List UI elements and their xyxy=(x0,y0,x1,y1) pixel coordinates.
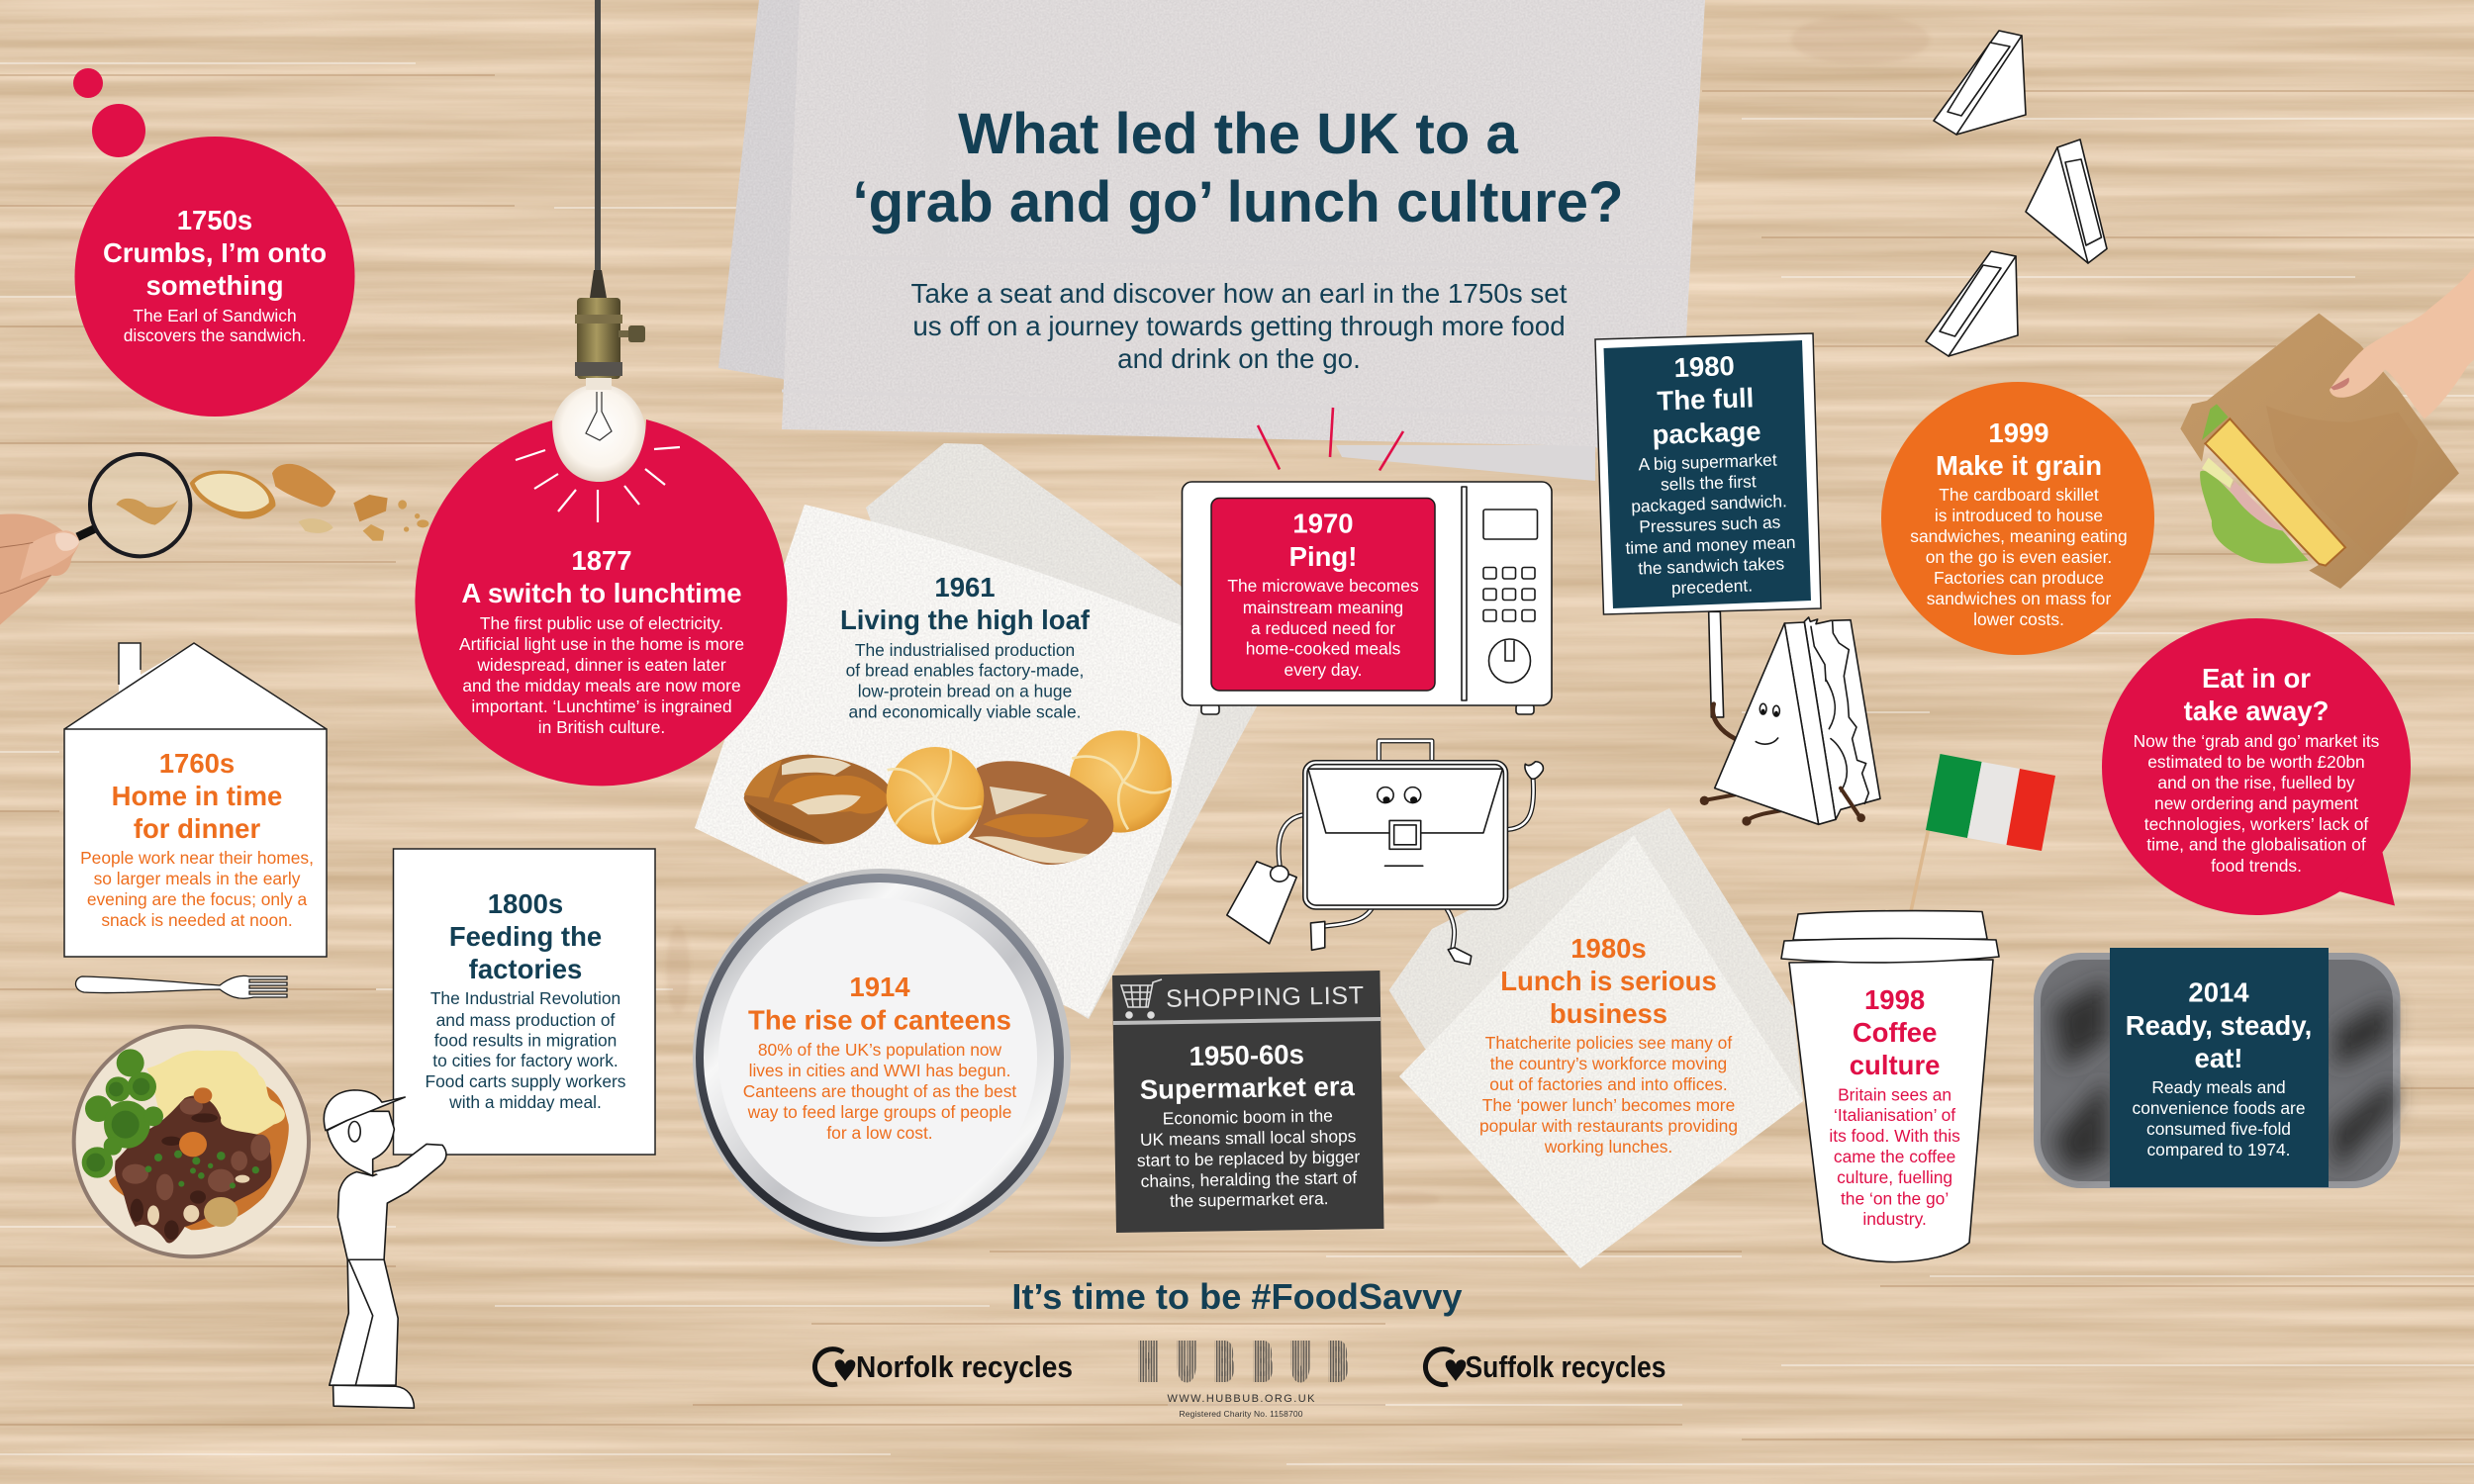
panel: 1998 coffee cup: culture, fuelling xyxy=(1837,1167,1952,1187)
panel: 1877 xyxy=(415,419,787,786)
panel: 1998 coffee cup: culture xyxy=(1850,1050,1940,1080)
panel: 1961 text: low-protein bread on a huge xyxy=(858,681,1072,700)
heading: ‘grab and go’ lunch culture? xyxy=(852,170,1624,234)
panel: 1999: lower costs. xyxy=(1973,609,2064,629)
logo: Hubbub: B xyxy=(1330,1339,1346,1386)
panel: 1970 microwave: every day. xyxy=(1285,660,1362,680)
panel: 1800s factories: factories xyxy=(469,954,582,984)
panel: 1950-60s shopping list: chains, heralding the start of xyxy=(1141,1167,1357,1191)
icon: factory worker holding sign xyxy=(324,1090,446,1408)
panel: 1999: Factories can produce xyxy=(1934,568,2104,588)
panel: 1760s house: 1760s xyxy=(159,748,235,779)
panel: 1980 full package sign: time and money mean xyxy=(1625,532,1796,558)
panel: 1998 coffee cup: Coffee xyxy=(1853,1017,1937,1048)
panel: 1950-60s shopping list: UK means small local shops xyxy=(1140,1126,1357,1150)
icon: hanging light bulb xyxy=(552,0,645,483)
icon: shopping cart xyxy=(1121,979,1162,1018)
panel: eat in or take away speech bubble: Eat in or xyxy=(2202,663,2311,694)
panel: 1980 full package sign: A big supermarket xyxy=(1638,450,1777,474)
top napkin xyxy=(718,0,1705,481)
panel: 1950-60s shopping list xyxy=(1112,971,1383,1233)
panel: 1800s factories: Feeding the xyxy=(449,921,602,952)
logo: Hubbub: U xyxy=(1179,1339,1194,1386)
panel: eat in or take away speech bubble: new ordering and payment xyxy=(2154,793,2358,813)
panel: 1980 full package sign: 1980 xyxy=(1673,350,1735,383)
panel: 1998 coffee cup xyxy=(1781,911,1999,1262)
panel: eat in or take away speech bubble: estimated to be worth £20bn xyxy=(2147,752,2365,772)
panel: 1961 text xyxy=(840,572,1091,722)
panel: 1998 coffee cup: industry. xyxy=(1862,1209,1927,1229)
panel: 1914 canteen plate: for a low cost. xyxy=(826,1123,933,1143)
panel: 1950-60s shopping list: the supermarket era. xyxy=(1170,1188,1329,1211)
panel: 1877: and the midday meals are now more xyxy=(462,676,741,696)
logo: Norfolk recycles: Norfolk recycles xyxy=(856,1349,1073,1384)
napkin under 1980s xyxy=(1389,808,1803,1268)
icon: sandwich box 2 xyxy=(2026,139,2107,263)
microwave rays xyxy=(1258,408,1403,471)
logo: Suffolk recycles: Suffolk recycles xyxy=(1465,1349,1666,1384)
panel: 1961 text: The industrialised production xyxy=(855,640,1075,660)
panel: 1760s house: evening are the focus; only a xyxy=(87,889,308,909)
icon: loaves and rolls xyxy=(744,730,1172,865)
panel: 1950-60s shopping list: SHOPPING LIST xyxy=(1166,981,1364,1013)
panel: 1800s factories: 1800s xyxy=(488,888,563,919)
panel: 1961 text: Living the high loaf xyxy=(840,604,1091,635)
panel: 1980s lunch is serious business xyxy=(1479,933,1738,1157)
paper towels under bread xyxy=(695,443,1257,1019)
icon: bread crumbs xyxy=(190,464,428,541)
intro text xyxy=(911,278,1568,374)
panel: 2014: Ready, steady, xyxy=(2126,1010,2312,1041)
intro text: Take a seat and discover how an earl in the 1750s set xyxy=(911,278,1568,309)
panel: 1999: sandwiches on mass for xyxy=(1927,589,2111,608)
logo: Hubbub: Registered Charity No. 1158700 xyxy=(1180,1409,1303,1419)
panel: 2014: Ready meals and xyxy=(2151,1077,2286,1097)
panel: 1800s factories: The Industrial Revolution xyxy=(430,988,620,1008)
panel: 1980 full package sign: the sandwich takes xyxy=(1638,553,1785,578)
panel: 1980 full package sign: package xyxy=(1652,416,1761,450)
panel: 1950-60s shopping list: Economic boom in the xyxy=(1163,1106,1333,1129)
icon: hand with magnifying glass xyxy=(0,454,190,625)
panel: 1877: Artificial light use in the home is more xyxy=(459,634,744,654)
panel: 1877: widespread, dinner is eaten later xyxy=(476,655,726,675)
panel: 1980 full package sign: packaged sandwich. xyxy=(1631,491,1787,516)
panel: 1914 canteen plate: lives in cities and WWI has begun. xyxy=(749,1061,1010,1080)
panel: eat in or take away speech bubble xyxy=(2102,618,2411,915)
panel: 1950-60s shopping list: Supermarket era xyxy=(1140,1070,1356,1105)
panel: eat in or take away speech bubble: food trends. xyxy=(2211,856,2302,876)
icon: sandwich box 3 xyxy=(1926,251,2018,356)
panel: 1998 coffee cup: its food. With this xyxy=(1829,1126,1960,1146)
panel: 1950-60s shopping list: start to be replaced by bigger xyxy=(1137,1147,1361,1170)
panel: 1950-60s shopping list: 1950-60s xyxy=(1189,1039,1304,1071)
panel: 1750s: The Earl of Sandwich xyxy=(133,306,297,325)
panel: 1800s factories: to cities for factory work. xyxy=(432,1051,618,1070)
panel: eat in or take away speech bubble: time, and the globalisation of xyxy=(2146,835,2366,855)
panel: 1961 text: and economically viable scale. xyxy=(849,702,1081,722)
icon: sandwich character xyxy=(1700,611,1880,826)
panel: 1970 microwave: a reduced need for xyxy=(1251,618,1395,638)
panel: 1914 canteen plate: The rise of canteens xyxy=(748,1005,1011,1035)
panel: 1914 canteen plate: Canteens are thought of as the best xyxy=(743,1081,1016,1101)
panel: 1980 full package sign xyxy=(1595,333,1821,614)
panel: 1877: A switch to lunchtime xyxy=(461,578,742,608)
icon: running briefcase character xyxy=(1227,741,1543,965)
panel: 2014: 2014 xyxy=(2188,977,2249,1008)
panel: 1980 full package sign: precedent. xyxy=(1671,575,1753,598)
panel: 1914 canteen plate: 80% of the UK’s population now xyxy=(758,1040,1002,1060)
panel: 1999 xyxy=(1881,382,2154,655)
panel: 1914 canteen plate: 1914 xyxy=(849,972,910,1002)
icon: ready meal tray xyxy=(2034,953,2401,1188)
logo: Hubbub: WWW.HUBBUB.ORG.UK xyxy=(1168,1393,1315,1405)
panel: 1750s: discovers the sandwich. xyxy=(124,325,306,345)
logo: Hubbub: B xyxy=(1216,1339,1232,1386)
icon: sandwich box 1 xyxy=(1934,31,2026,135)
panel: 2014: eat! xyxy=(2195,1043,2242,1073)
panel: 1750s: something xyxy=(145,270,284,301)
panel: 1750s xyxy=(75,137,354,417)
logo: Hubbub: H xyxy=(1140,1339,1156,1386)
panel: 2014: compared to 1974. xyxy=(2146,1140,2291,1159)
panel: 1877: 1877 xyxy=(571,545,632,576)
panel: 2014 xyxy=(2110,948,2329,1187)
panel: 1760s house: People work near their homes, xyxy=(80,848,314,868)
closing slogan: It’s time to be #FoodSavvy xyxy=(1011,1276,1463,1317)
panel: 1998 coffee cup: ‘Italianisation’ of xyxy=(1834,1105,1955,1125)
panel: 1999: 1999 xyxy=(1988,417,2049,448)
panel: 1970 microwave: Ping! xyxy=(1289,541,1357,572)
panel: 1970 microwave xyxy=(1182,482,1552,714)
icon: hand holding paper-wrapped sandwich xyxy=(2180,267,2474,589)
panel: 1980s lunch is serious business: business xyxy=(1550,998,1667,1029)
panel: 1999: The cardboard skillet xyxy=(1939,485,2099,505)
icon: fork xyxy=(75,975,287,998)
panel: 1980s lunch is serious business: The ‘power lunch’ becomes more xyxy=(1482,1095,1735,1115)
panel: 1980 full package sign: sells the first xyxy=(1661,471,1757,495)
panel: 1980s lunch is serious business: the country’s workforce moving xyxy=(1490,1054,1727,1073)
panel: 1980s lunch is serious business: popular with restaurants providing xyxy=(1479,1116,1738,1136)
panel: 1980 full package sign: The full xyxy=(1657,382,1755,417)
panel: 1980 full package sign: Pressures such as xyxy=(1639,511,1781,536)
panel: 1961 text: of bread enables factory-made, xyxy=(846,661,1084,681)
panel: 1800s factories: Food carts supply workers xyxy=(426,1071,626,1091)
heading: What led the UK to a xyxy=(958,102,1518,166)
panel: eat in or take away speech bubble: and on the rise, fuelled by xyxy=(2157,773,2355,792)
panel: 1999: is introduced to house xyxy=(1935,506,2103,525)
panel: 2014: convenience foods are xyxy=(2132,1098,2306,1118)
panel: 1877: in British culture. xyxy=(538,717,665,737)
panel: 1760s house xyxy=(64,643,327,957)
panel: 1998 coffee cup: came the coffee xyxy=(1834,1147,1955,1166)
panel: 1980s lunch is serious business: working lunches. xyxy=(1544,1137,1672,1157)
panel: 1980s lunch is serious business: 1980s xyxy=(1570,933,1647,964)
panel: 1750s: 1750s xyxy=(177,205,252,235)
panel: 1914 canteen plate xyxy=(693,869,1071,1247)
icon: plate of stew, mash and broccoli xyxy=(72,1025,311,1258)
logo: Hubbub: B xyxy=(1255,1339,1271,1386)
light rays xyxy=(516,447,680,522)
panel: 2014: consumed five-fold xyxy=(2146,1119,2291,1139)
panel: 1980s lunch is serious business: out of factories and into offices. xyxy=(1489,1074,1728,1094)
panel: 1961 text: 1961 xyxy=(934,572,996,603)
logo: Hubbub xyxy=(1140,1339,1346,1419)
panel: 1970 microwave: mainstream meaning xyxy=(1243,598,1403,617)
panel: 1999: sandwiches, meaning eating xyxy=(1910,526,2128,546)
panel: 1877: important. ‘Lunchtime’ is ingrained xyxy=(471,696,732,716)
panel: 1998 coffee cup: 1998 xyxy=(1864,984,1925,1015)
panel: 1760s house: so larger meals in the early xyxy=(94,869,301,888)
panel: 1998 coffee cup: Britain sees an xyxy=(1838,1085,1951,1105)
panel: 1980s lunch is serious business: Lunch is serious xyxy=(1500,966,1717,996)
panel: 1750s: Crumbs, I’m onto xyxy=(103,237,327,268)
panel: 1998 coffee cup: the ‘on the go’ xyxy=(1841,1189,1949,1209)
panel: 1970 microwave: The microwave becomes xyxy=(1227,576,1419,596)
panel: 1970 microwave: home-cooked meals xyxy=(1246,639,1401,659)
panel: 1999: on the go is even easier. xyxy=(1926,547,2112,567)
logo: Hubbub: U xyxy=(1292,1339,1308,1386)
panel: 1999: Make it grain xyxy=(1936,450,2102,481)
panel: 1877: The first public use of electricity. xyxy=(480,613,723,633)
panel: 1800s factories: with a midday meal. xyxy=(448,1092,602,1112)
panel: eat in or take away speech bubble: take away? xyxy=(2184,696,2329,726)
heading xyxy=(852,102,1624,234)
panel: eat in or take away speech bubble: technologies, workers’ lack of xyxy=(2144,814,2368,834)
panel: 1800s factories: and mass production of xyxy=(436,1010,616,1030)
panel: 1760s house: Home in time xyxy=(112,781,282,811)
panel: 1800s factories: food results in migration xyxy=(434,1031,617,1051)
thought bubble dots xyxy=(73,68,145,157)
panel: 1970 microwave: 1970 xyxy=(1292,509,1354,538)
intro text: us off on a journey towards getting through more food xyxy=(912,311,1566,341)
panel: 1800s factories xyxy=(394,849,655,1155)
panel: 1980s lunch is serious business: Thatcherite policies see many of xyxy=(1485,1033,1732,1053)
panel: eat in or take away speech bubble: Now the ‘grab and go’ market its xyxy=(2134,731,2380,751)
panel: 1760s house: snack is needed at noon. xyxy=(101,910,293,930)
icon: Italian flag cocktail stick xyxy=(1911,754,2055,911)
panel: 1760s house: for dinner xyxy=(134,813,260,844)
intro text: and drink on the go. xyxy=(1117,343,1361,374)
panel: 1914 canteen plate: way to feed large groups of people xyxy=(747,1102,1011,1122)
